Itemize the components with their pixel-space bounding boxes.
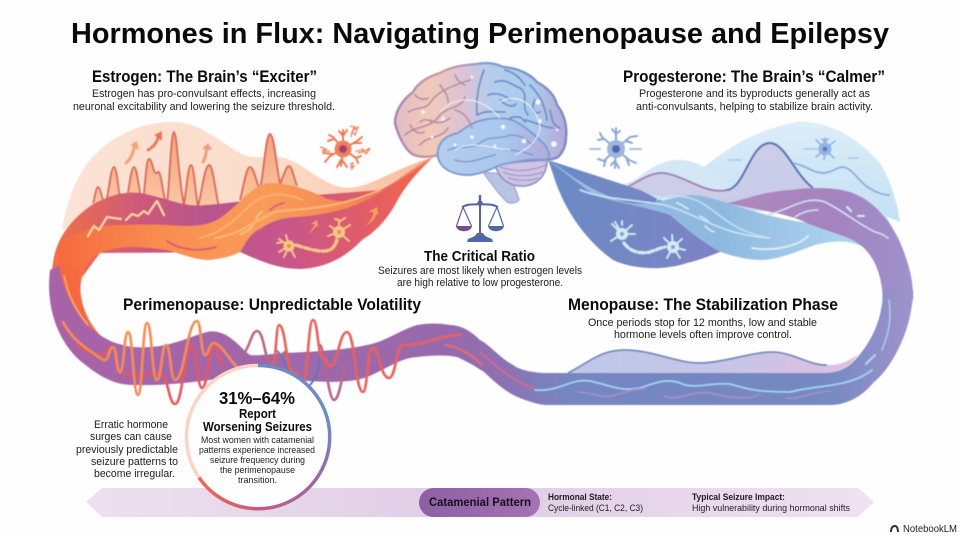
neurons in ribbon [277, 218, 350, 257]
banner arrow [86, 488, 874, 517]
text: progesterone description [636, 88, 873, 113]
heading: estrogen: Estrogen: The Brain’s “Exciter” [92, 68, 317, 86]
text: critical ratio description: are high relative to low progesterone. [397, 277, 563, 289]
typical seizure impact: Typical Seizure Impact: [692, 492, 785, 502]
callout: 31%-64% statistic circle: Worsening Seizures [203, 420, 312, 434]
neurons in ribbon [611, 221, 685, 258]
cerebellum [495, 158, 547, 186]
callout: 31%-64% statistic circle: Report [239, 407, 277, 421]
heading: the critical ratio: The Critical Ratio [424, 249, 535, 265]
icon: excited neuron [320, 126, 370, 170]
text: menopause description: hormone levels often improve control. [614, 329, 792, 341]
text: estrogen description: neuronal excitability and lowering the seizure threshold. [73, 101, 335, 113]
icon: brain [395, 63, 566, 203]
constellation dots [421, 76, 558, 147]
panel: estrogen illustration [52, 122, 433, 290]
text: menopause description: Once periods stop for 12 months, low and stable [588, 317, 817, 329]
panel: progesterone illustration [548, 122, 913, 300]
calming hormone wave chart [573, 143, 813, 205]
temporal lobe [438, 118, 549, 175]
hormonal state [548, 492, 643, 513]
callout: 31%-64% statistic circle: the perimenopause [220, 465, 295, 476]
ribbon highlights [580, 190, 888, 249]
text: erratic surges: become irregular. [94, 468, 175, 480]
purple ribbon [727, 188, 913, 300]
typical seizure impact: High vulnerability during hormonal shifts [692, 503, 850, 513]
callout: 31%-64% statistic circle: Most women with catamenial [201, 435, 314, 446]
banner: catamenial pattern [86, 488, 874, 517]
text: critical ratio description: Seizures are most likely when estrogen levels [378, 265, 582, 277]
heading: menopause: Menopause: The Stabilization Phase [568, 296, 838, 314]
text: progesterone description: Progesterone and its byproducts generally act as [639, 88, 870, 100]
orange ribbon [58, 157, 433, 290]
purple to blue band [49, 265, 913, 405]
pill text: Catamenial Pattern [429, 495, 531, 509]
text: erratic surges: previously predictable [76, 444, 178, 456]
text: erratic surges [76, 419, 178, 480]
title: Hormones in Flux: Navigating Perimenopause and Epilepsy [71, 18, 889, 50]
volatile hormone oscillation lines [63, 320, 482, 404]
text: erratic surges: seizure patterns to [91, 456, 178, 468]
menopause stable hormone hills [568, 350, 858, 373]
hormonal state: Cycle-linked (C1, C2, C3) [548, 503, 643, 513]
icon: balance scale [456, 195, 504, 242]
dark blue ribbon [548, 160, 740, 268]
seizure squiggle [88, 201, 164, 236]
calm wave lines [480, 300, 890, 398]
panel: hormone flow band [49, 262, 913, 405]
text: progesterone description: anti-convulsants, helping to stabilize brain activity. [636, 101, 873, 113]
heading: progesterone: Progesterone: The Brain’s “Calmer” [623, 68, 885, 86]
icon: calm neuron [590, 128, 641, 168]
tail highlight [64, 275, 88, 325]
callout: 31%-64% statistic circle: patterns experience increased [199, 445, 315, 456]
text: estrogen description: Estrogen has pro-convulsant effects, increasing [92, 88, 316, 100]
arrows rising [126, 131, 212, 163]
text: erratic surges: Erratic hormone [94, 419, 168, 431]
hormonal state: Hormonal State: [548, 492, 612, 502]
arrows in ribbon [308, 207, 378, 234]
text: critical ratio description [378, 265, 582, 289]
orange ribbon tail [59, 262, 100, 335]
text: estrogen description [73, 88, 335, 113]
heading: perimenopause: Perimenopause: Unpredictable Volatility [123, 296, 422, 314]
hormone spikes chart [93, 132, 297, 207]
callout: 31%-64% statistic circle [186, 365, 330, 509]
callout: 31%-64% statistic circle: seizure frequency during [210, 455, 305, 466]
callout: 31%-64% statistic circle: transition. [238, 475, 277, 486]
text: menopause description [588, 317, 817, 341]
icon: small calm neuron [728, 138, 858, 160]
magenta back ribbon [52, 157, 433, 280]
callout: 31%-64% statistic circle: 31%–64% [219, 388, 295, 408]
typical seizure impact [692, 492, 850, 513]
cerebrum [395, 63, 566, 165]
ribbon highlights [167, 190, 380, 250]
light blue hill [700, 122, 900, 222]
brain folds [405, 70, 560, 162]
brain stem [483, 172, 519, 203]
pill label [419, 488, 540, 517]
light blue ribbon [548, 160, 910, 290]
text: erratic surges: surges can cause [90, 431, 172, 443]
peach hill [62, 122, 433, 240]
